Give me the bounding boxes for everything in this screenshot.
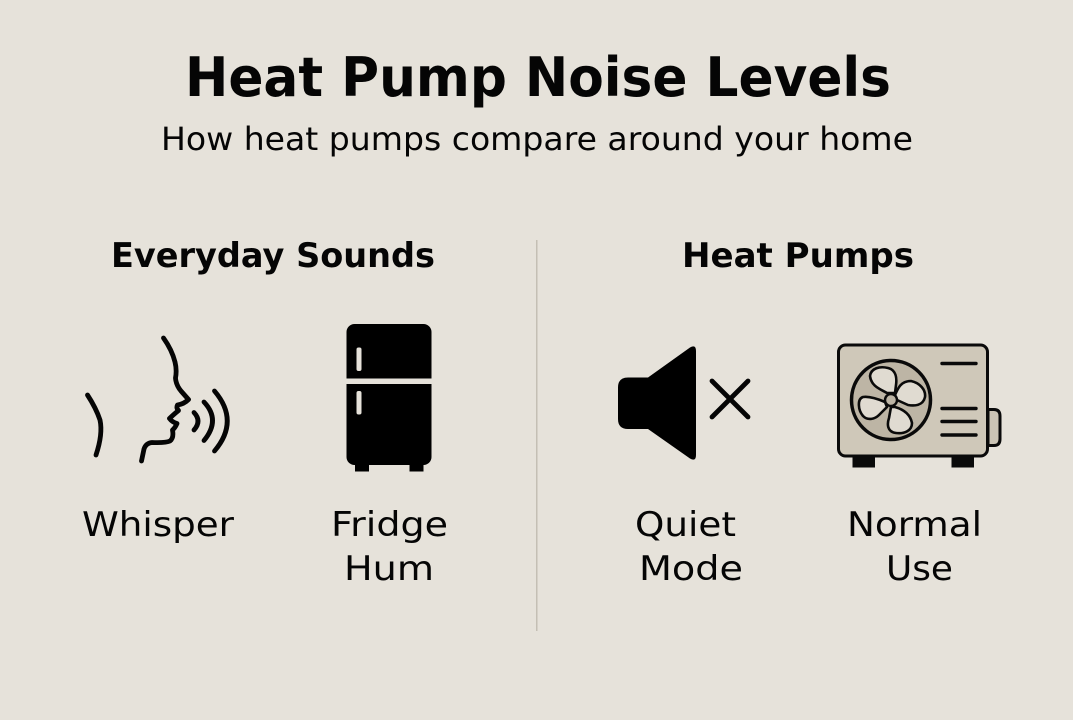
icon: heat pump unit xyxy=(838,345,1000,468)
title: Heat Pump Noise Levels xyxy=(185,46,891,109)
label: normal use: Normal xyxy=(847,505,982,545)
icon: fridge xyxy=(346,324,432,472)
label: quiet mode: Quiet xyxy=(635,505,736,545)
subtitle: How heat pumps compare around your home xyxy=(161,120,913,158)
heading: everyday sounds: Everyday Sounds xyxy=(111,236,435,276)
label: fridge hum: Fridge xyxy=(331,505,448,545)
label: quiet mode: Mode xyxy=(639,549,743,589)
label: fridge hum: Hum xyxy=(344,549,434,589)
label: quiet mode xyxy=(635,505,743,589)
panel: heat pumps xyxy=(618,236,1000,589)
label: fridge hum xyxy=(331,505,448,589)
icon: muted speaker xyxy=(618,346,748,460)
label: whisper: Whisper xyxy=(82,505,234,545)
icon: whisper xyxy=(88,338,227,461)
panel: everyday sounds xyxy=(82,236,448,589)
heading: heat pumps: Heat Pumps xyxy=(682,236,914,276)
label: normal use: Use xyxy=(886,549,953,589)
label: normal use xyxy=(847,505,982,589)
